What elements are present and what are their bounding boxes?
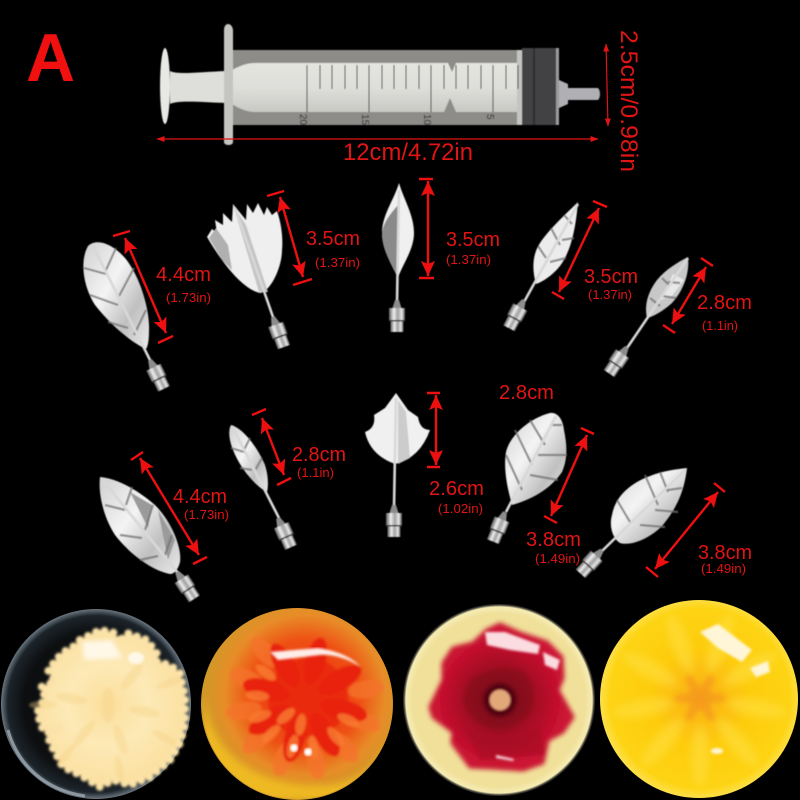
dimension 3.5cm xyxy=(267,191,360,285)
barrel xyxy=(232,50,558,125)
dimension 3.8cm: (1.49in) xyxy=(701,561,746,576)
dimension 4.4cm: 4.4cm xyxy=(173,486,227,508)
graduation numbers: 5 xyxy=(484,114,495,120)
cream flower xyxy=(29,630,185,787)
glare xyxy=(700,624,770,754)
dimension 3.5cm: (1.37in) xyxy=(446,252,491,267)
yellow lower edge xyxy=(202,708,378,799)
label 2.8cm: 2.8cm xyxy=(499,382,554,404)
red flower xyxy=(430,624,573,770)
title letter A: A xyxy=(26,20,75,96)
petals xyxy=(612,612,788,786)
nozzle 3: narrow pointed leaf xyxy=(382,183,414,332)
graduation numbers: 20 xyxy=(297,114,308,126)
rubber seal xyxy=(517,48,559,125)
dimension 2.6cm xyxy=(427,393,484,516)
nozzle 7: small oval leaf xyxy=(229,425,298,550)
dimension 3.5cm: (1.37in) xyxy=(315,255,360,270)
dimension: syringe diameter: 2.5cm/0.98in xyxy=(615,30,642,172)
dimension 3.8cm xyxy=(526,428,594,566)
jelly 2: orange-red dahlia xyxy=(200,608,395,800)
dimension 3.5cm: 3.5cm xyxy=(446,229,500,251)
glare xyxy=(485,632,560,761)
dimension 3.8cm: 3.8cm xyxy=(698,542,752,564)
dimension 2.6cm: 2.6cm xyxy=(429,478,484,500)
dome xyxy=(403,604,595,796)
dimension 4.4cm: (1.73in) xyxy=(184,507,229,522)
dome xyxy=(201,608,393,800)
dimension 4.4cm: 4.4cm xyxy=(156,264,211,286)
dimension 3.8cm: 3.8cm xyxy=(526,529,581,551)
dimension 3.5cm: (1.37in) xyxy=(588,287,632,302)
syringe xyxy=(160,24,600,145)
dome lower-left reflection xyxy=(8,730,85,796)
stamen xyxy=(484,684,516,716)
nozzle 5: small slim leaf xyxy=(602,257,688,378)
dimension 2.8cm: 2.8cm xyxy=(697,292,752,314)
graduation numbers: 15 xyxy=(359,114,370,126)
dimension 4.4cm: (1.73in) xyxy=(166,290,211,305)
dimension 3.8cm xyxy=(646,483,752,577)
plunger thumb rest and shaft xyxy=(160,48,226,124)
dimension 2.8cm xyxy=(252,409,346,485)
nozzle xyxy=(559,80,600,108)
dimension 3.8cm: (1.49in) xyxy=(535,551,580,566)
nozzle 1: long leaf xyxy=(83,242,171,392)
nozzle 6: long leaf lower row xyxy=(100,477,201,603)
jelly 4: yellow dahlia xyxy=(600,600,798,798)
nozzle 4: slim leaf xyxy=(502,202,578,332)
dimension 4.4cm xyxy=(113,231,211,343)
dimension 3.5cm: 3.5cm xyxy=(584,266,638,288)
clear dome xyxy=(1,609,191,799)
glare xyxy=(270,648,361,667)
nozzle 2: tulip serrated petal xyxy=(207,203,291,350)
dimension 4.4cm xyxy=(131,452,229,564)
dimension 3.5cm xyxy=(419,179,500,278)
graduation numbers xyxy=(297,114,495,126)
dimension 2.6cm: (1.02in) xyxy=(438,501,483,516)
jelly 1: cream chrysanthemum in clear dome xyxy=(1,609,191,799)
dimension 2.8cm xyxy=(663,258,752,333)
jelly 3: red poppy on yellow xyxy=(403,604,595,796)
finger flange xyxy=(224,24,233,145)
glare xyxy=(82,640,122,660)
nozzle 8: maple-shaped leaf xyxy=(365,393,430,537)
dimension 2.8cm: (1.1in) xyxy=(702,318,738,333)
graduation numbers: 10 xyxy=(421,114,432,126)
dimension 3.5cm xyxy=(552,201,638,302)
plunger body xyxy=(232,63,520,112)
dimension 2.8cm: 2.8cm xyxy=(292,444,346,466)
dimension 2.8cm: (1.1in) xyxy=(297,465,334,480)
dimension: syringe length: 12cm/4.72in xyxy=(343,139,473,166)
dimension 3.5cm: 3.5cm xyxy=(306,228,360,250)
graduation ticks xyxy=(307,65,518,112)
dome xyxy=(600,600,798,798)
nozzle 10: wide tilted leaf xyxy=(575,468,687,579)
nozzle 9: wide leaf xyxy=(486,413,567,545)
petals xyxy=(225,633,385,780)
